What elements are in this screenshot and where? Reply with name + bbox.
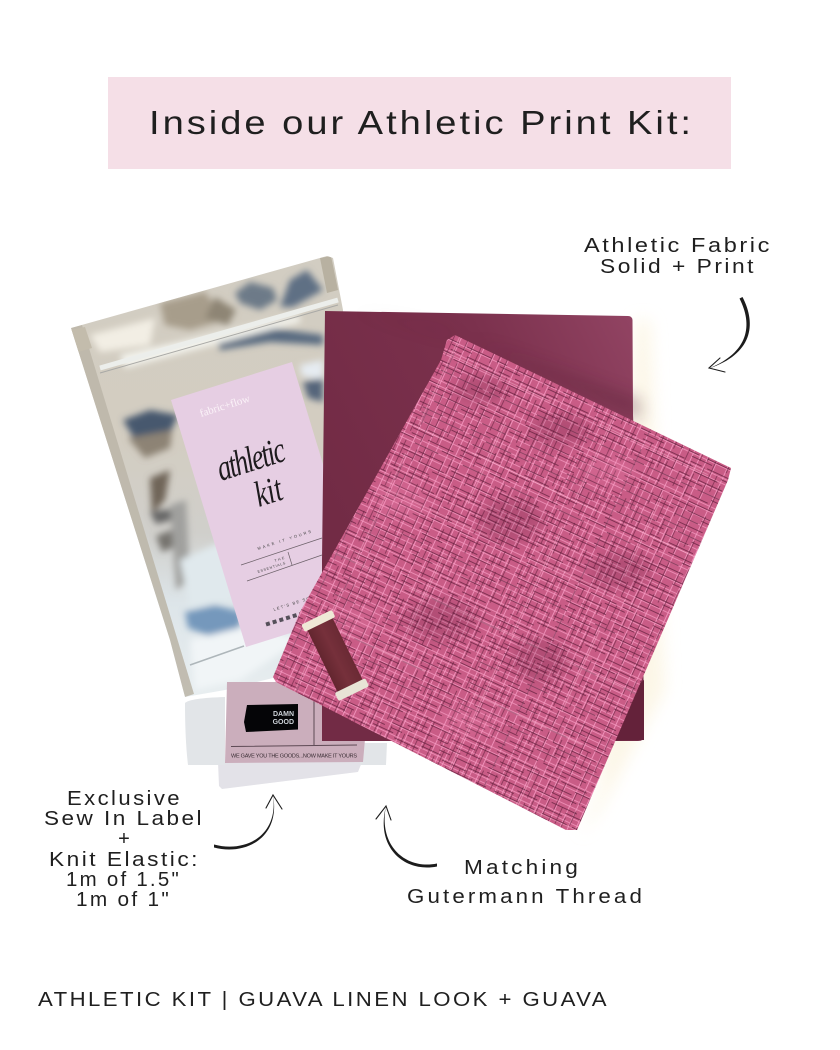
sew in label: GOOD: [273, 719, 294, 726]
label: sew in label and elastic: 1m of 1.5": [66, 869, 181, 891]
knit elastic: [185, 697, 387, 789]
label: sew in label and elastic: Exclusive: [67, 788, 182, 810]
sew in label: DAMN: [273, 711, 294, 718]
label: sew in label and elastic: +: [118, 828, 130, 850]
footer caption: ATHLETIC KIT | GUAVA LINEN LOOK + GUAVA: [38, 989, 609, 1011]
card fine print: MAKE IT YOURS: [257, 529, 312, 551]
label: matching thread: Gutermann Thread: [407, 886, 645, 908]
label: athletic fabric: [584, 235, 772, 278]
card fine print: LET'S BE SOCIAL: [273, 591, 324, 612]
title banner: Inside our Athletic Print Kit:: [149, 104, 694, 141]
label: sew in label and elastic: Knit Elastic:: [49, 849, 200, 871]
card fine print: ESSENTIALS: [257, 561, 286, 574]
print fabric: [260, 320, 740, 840]
insert card: athletic kit: [171, 362, 367, 647]
label: sew in label and elastic: 1m of 1": [76, 889, 171, 911]
insert card: athletic kit: kit: [249, 467, 288, 515]
foil pouch: [70, 256, 345, 697]
arrow: to thread: [376, 806, 437, 868]
label: sew in label and elastic: Sew In Label: [44, 808, 204, 830]
card fine print: THE: [274, 556, 285, 563]
label: sew in label and elastic: [44, 788, 204, 911]
card fine print: [241, 529, 324, 624]
title banner: [108, 77, 731, 169]
arrow: to fabric: [709, 297, 750, 372]
label: matching thread: [407, 857, 645, 908]
photo: kit contents: [70, 256, 740, 840]
label: athletic fabric: Solid + Print: [600, 256, 756, 278]
card tagline: WE GAVE YOU THE GOODS...NOW MAKE IT YOURS: [231, 754, 357, 760]
soft warm shadow: [580, 320, 665, 836]
label: matching thread: Matching: [464, 857, 581, 879]
sew in label: [244, 704, 298, 732]
card brand: fabric+flow: [198, 393, 252, 420]
solid fabric: [322, 310, 644, 741]
arrow: to elastic: [214, 795, 282, 850]
label card: [225, 682, 370, 763]
card script title: athletic: [211, 429, 290, 489]
label: athletic fabric: Athletic Fabric: [584, 235, 772, 257]
thread spool: [301, 610, 369, 701]
